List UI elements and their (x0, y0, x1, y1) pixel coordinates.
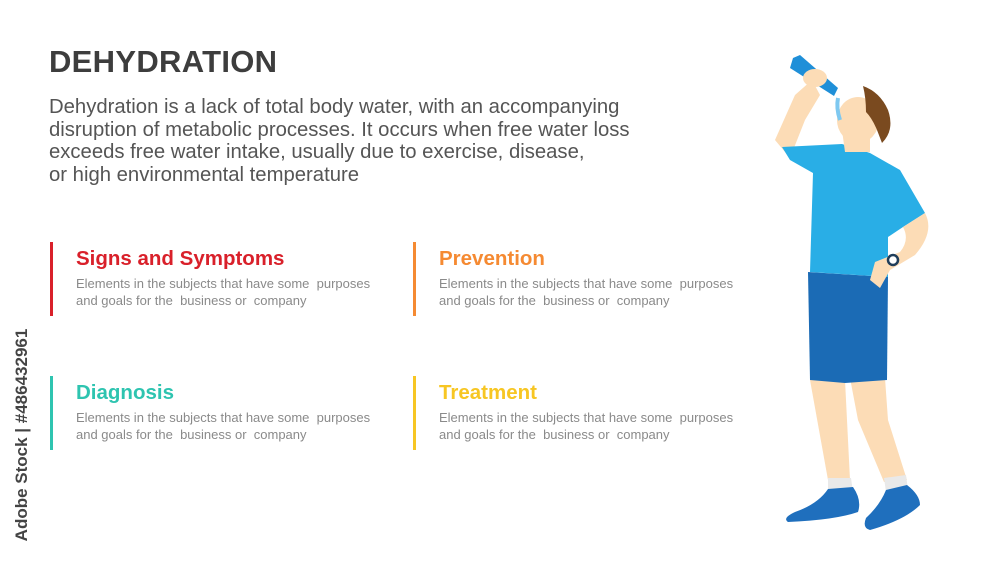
text: diagnosis description: Elements in the subjects that have some purposes (76, 410, 370, 425)
heading: treatment: Treatment (439, 381, 537, 404)
shirt (782, 144, 925, 277)
bottle (790, 55, 838, 96)
watch (888, 255, 898, 265)
text: diagnosis description: and goals for the business or company (76, 427, 307, 442)
title: DEHYDRATION (49, 44, 277, 79)
intro paragraph: exceeds free water intake, usually due to exercise, disease, (49, 141, 584, 163)
watermark: vertical stock id: Adobe Stock | #486432961 (12, 329, 31, 541)
heading: prevention: Prevention (439, 247, 545, 270)
text: prevention description: and goals for the business or company (439, 293, 670, 308)
illustration: man drinking water (775, 55, 928, 530)
neck and head (842, 128, 870, 152)
intro paragraph: Dehydration is a lack of total body water, with an accompanying (49, 96, 619, 118)
heading: diagnosis: Diagnosis (76, 381, 174, 404)
text: signs description (76, 276, 370, 308)
text: diagnosis description (76, 410, 370, 442)
water stream (837, 98, 840, 120)
intro paragraph: disruption of metabolic processes. It occurs when free water loss (49, 118, 630, 140)
intro paragraph (49, 96, 630, 186)
hand on bottle (803, 69, 827, 87)
text: treatment description: and goals for the business or company (439, 427, 670, 442)
panel: diagnosis (50, 376, 370, 450)
text: treatment description: Elements in the subjects that have some purposes (439, 410, 733, 425)
legs (810, 380, 850, 480)
shorts (808, 272, 888, 383)
socks (828, 478, 853, 492)
hair (863, 86, 890, 143)
text: prevention description (439, 276, 733, 308)
right arm (870, 213, 928, 288)
text: treatment description (439, 410, 733, 442)
text: signs description: Elements in the subjects that have some purposes (76, 276, 370, 291)
panel: signs and symptoms (50, 242, 370, 316)
intro paragraph: or high environmental temperature (49, 164, 359, 186)
text: signs description: and goals for the business or company (76, 293, 307, 308)
text: prevention description: Elements in the subjects that have some purposes (439, 276, 733, 291)
panel: treatment (413, 376, 733, 450)
panel: prevention (413, 242, 733, 316)
raised arm (775, 80, 820, 158)
shoes (786, 487, 859, 522)
heading: signs and symptoms: Signs and Symptoms (76, 247, 284, 270)
